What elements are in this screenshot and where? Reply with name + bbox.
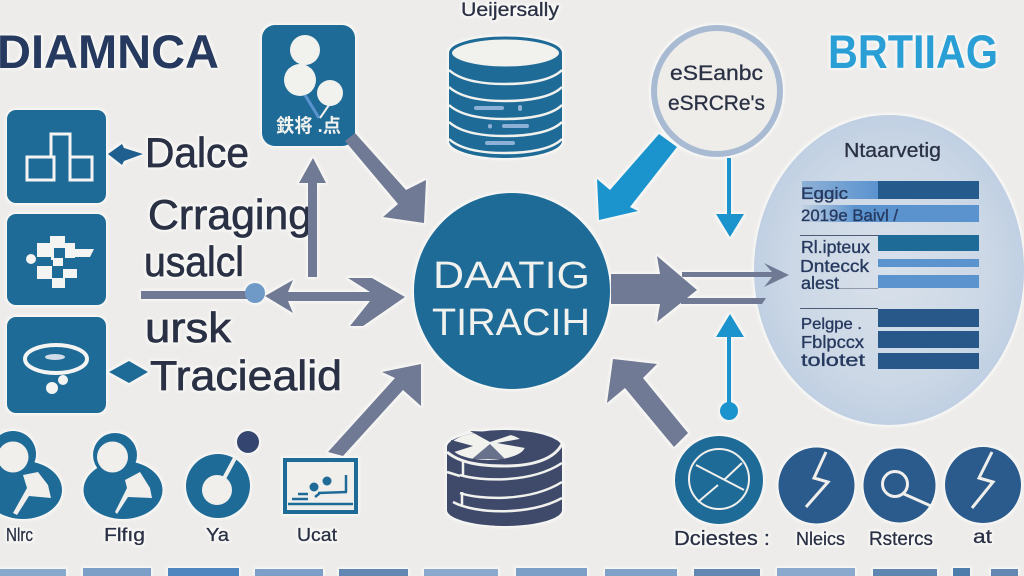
bars group three xyxy=(800,308,979,370)
central circle: DAATIG xyxy=(433,255,590,297)
footer colour strip xyxy=(0,568,1018,576)
icon: ring with dot xyxy=(186,431,259,518)
bars group one: 2019e Baivl / xyxy=(801,206,898,225)
label: Ya: Ya xyxy=(206,525,230,545)
arrow: lower right to centre xyxy=(607,359,688,447)
label: Crraging: Crraging xyxy=(148,191,312,238)
dot: line junction xyxy=(245,283,265,303)
label: Nleics: Nleics xyxy=(796,529,845,549)
icon: lightning one xyxy=(778,448,854,524)
icon: top node card xyxy=(262,25,355,146)
label: Nlrc: Nlrc xyxy=(6,525,33,545)
arrow: two way xyxy=(265,278,405,326)
left title: DIAMNCA xyxy=(0,25,219,78)
bars group two: Rl.ipteux xyxy=(801,237,870,257)
icon: ring xyxy=(7,317,106,413)
icon: database bottom xyxy=(447,430,562,526)
arrow: card to centre xyxy=(345,133,426,223)
icon: framed chart xyxy=(285,460,356,512)
arrow: thin blue down xyxy=(716,158,744,237)
arrow: diamond one xyxy=(108,144,143,165)
bars group three: tolotet xyxy=(801,350,865,370)
icon: person one xyxy=(0,431,62,519)
label: Dalce: Dalce xyxy=(145,129,249,176)
central circle: TIRACIH xyxy=(432,302,590,344)
bars group three: Fblpcсx xyxy=(801,332,864,352)
arrow: thin upper xyxy=(682,263,789,287)
panel title: Ntaarvetig xyxy=(844,140,941,162)
label: Dciestes: Dсiestes : xyxy=(674,528,770,550)
arrow: magnifier to centre xyxy=(597,134,677,220)
bars group two xyxy=(800,235,979,293)
bars group one xyxy=(801,181,979,225)
bars group three: Pelgpe . xyxy=(801,316,862,333)
top label: Ueijersally xyxy=(461,0,560,21)
icon: crossed circle xyxy=(675,436,763,524)
callout: magnifier xyxy=(654,28,780,154)
arrow: up xyxy=(299,158,326,277)
icon: person two xyxy=(84,433,162,519)
icon: mosaic xyxy=(7,214,106,305)
label: Traciealid: Traciealid xyxy=(150,352,342,399)
icon: building blocks xyxy=(7,110,106,203)
label: usalcl: usalcl xyxy=(144,238,244,285)
callout: magnifier: eSRCRe's xyxy=(668,92,765,115)
icon: magnifier small xyxy=(864,448,936,522)
central circle xyxy=(414,193,610,389)
panel: results ellipse xyxy=(754,115,1024,425)
bars group two: alest xyxy=(801,273,839,293)
bars group two: Dnteсck xyxy=(800,256,869,276)
icon: top node card: 鉄将 .点 xyxy=(276,114,341,137)
label: at: at xyxy=(973,527,993,548)
icon: database top xyxy=(449,38,562,158)
arrow: centre to right xyxy=(611,256,697,322)
arrow: thin blue up with dot xyxy=(716,314,744,420)
label: Rstercs: Rstercs xyxy=(869,529,933,550)
label: ursk: ursk xyxy=(145,304,232,351)
right title: BRTIIAG xyxy=(828,25,998,78)
callout: magnifier: eSEanbc xyxy=(670,62,763,85)
arrow: lower left to centre xyxy=(328,364,421,456)
arrow: horizontal line xyxy=(141,291,253,299)
arrow: diamond two xyxy=(109,361,148,383)
icon: lightning two xyxy=(945,447,1021,523)
label: Flfıg: Flfıg xyxy=(104,525,145,545)
bars group one: Eggic xyxy=(801,184,849,203)
arrow: thin lower xyxy=(681,298,766,304)
label: Ucat: Ucat xyxy=(297,524,337,545)
panel: left icon column xyxy=(7,110,342,413)
